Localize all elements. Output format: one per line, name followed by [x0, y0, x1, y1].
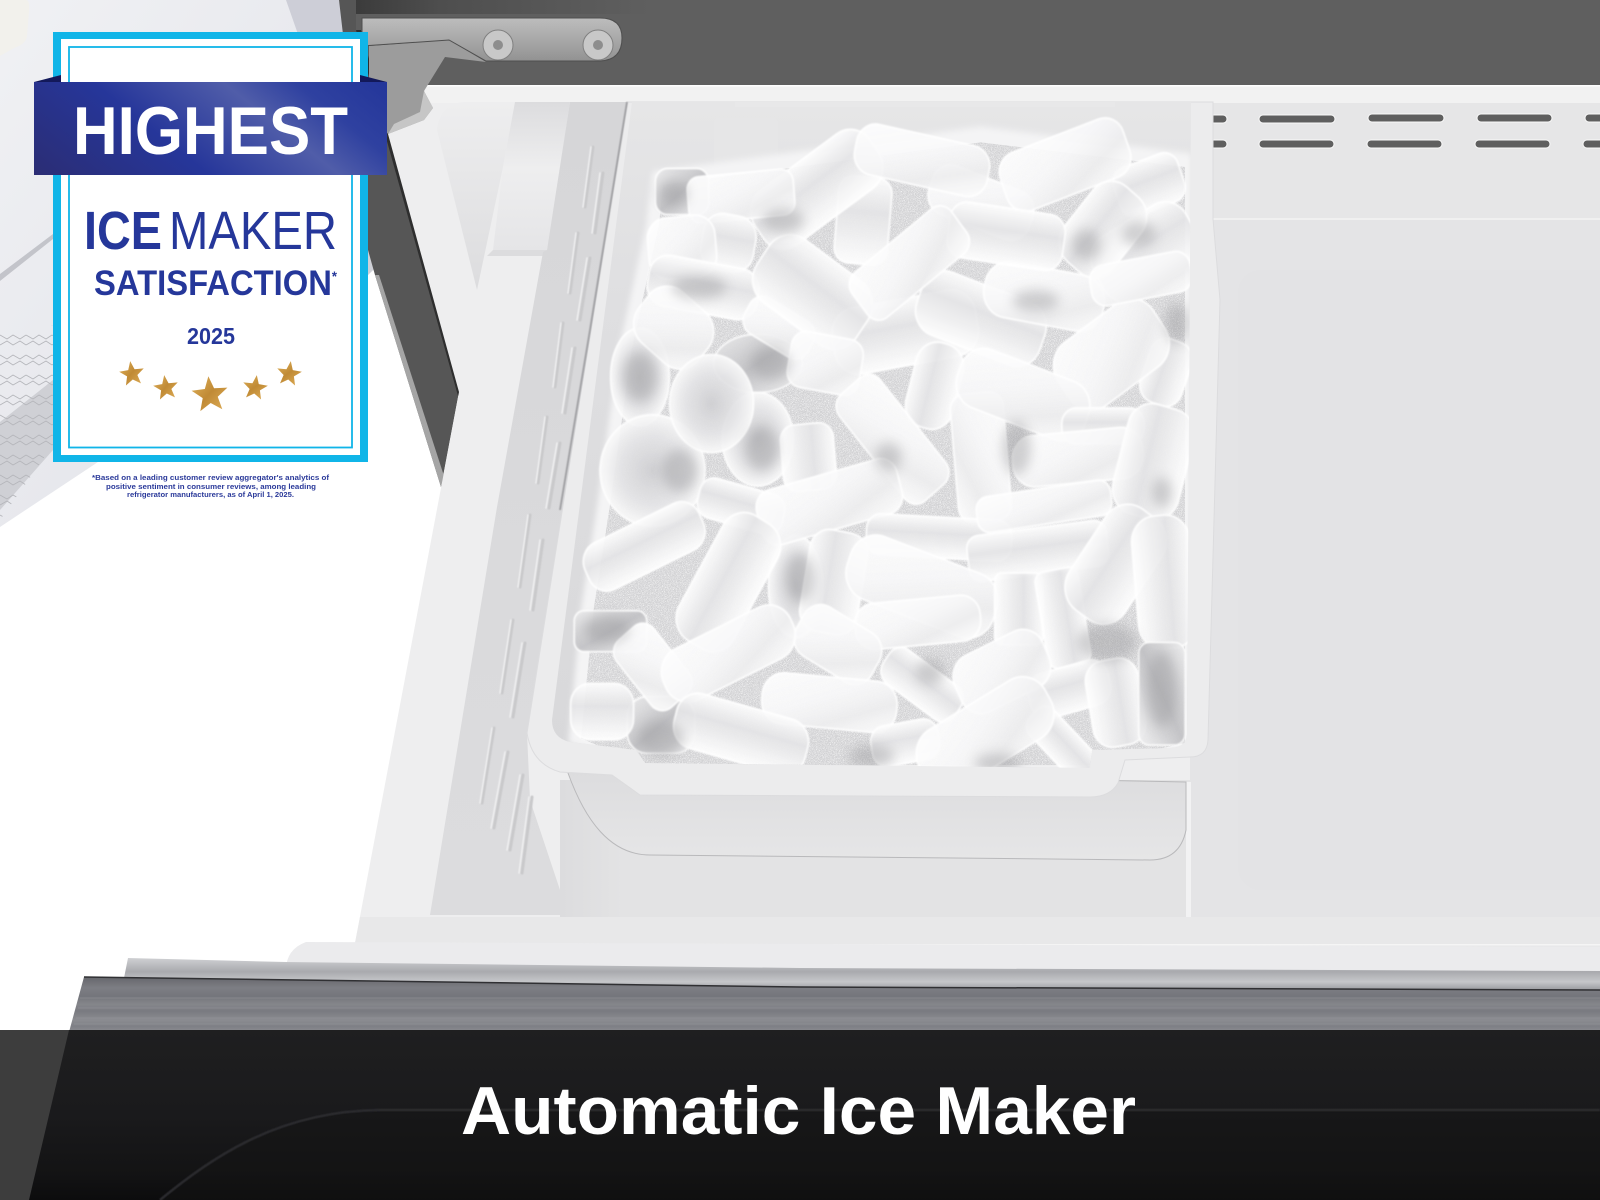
award badge: [34, 32, 387, 499]
door gasket: [124, 958, 1600, 992]
metal hinge: [362, 18, 622, 134]
drawer body: [355, 85, 1600, 1000]
drawer front rail: [286, 917, 1600, 985]
open door shelf: [0, 0, 385, 527]
wall dimples: [480, 147, 603, 873]
heading: ice maker: MAKER: [169, 201, 337, 261]
ice bin body: [568, 770, 1186, 860]
back wall and floor panel: [1186, 103, 1600, 917]
ribbon: HIGHEST: HIGHEST: [73, 93, 348, 169]
ribbon: HIGHEST: [34, 75, 387, 175]
ice shadows: [583, 181, 1188, 772]
dark top cavity: [350, 0, 1600, 86]
heading: ice maker: [84, 201, 337, 261]
caption text: Automatic Ice Maker: [461, 1073, 1136, 1149]
footnote: *Based on a leading customer review aggregator's analytics of: [92, 473, 330, 482]
footnote: [92, 473, 330, 499]
badge frame: [53, 32, 368, 462]
caption band: [0, 1030, 1600, 1200]
five gold stars: [118, 359, 303, 412]
heading: ice maker: ICE: [84, 201, 162, 261]
heading: satisfaction: *: [332, 268, 338, 284]
steel door panel: [69, 977, 1600, 1032]
dark door edge strip: [339, 0, 461, 487]
rim shadow line: [560, 102, 627, 510]
year: 2025: [187, 323, 235, 349]
footnote: refrigerator manufacturers, as of April 1, 2025.: [127, 490, 294, 499]
ice bin interior: [552, 102, 1191, 768]
ice cubes pile: [568, 112, 1208, 801]
vent slots: [1205, 114, 1600, 148]
heading: satisfaction: SATISFACTION: [94, 264, 348, 303]
ice bin rim: [527, 102, 1220, 797]
footnote: positive sentiment in consumer reviews, among leading: [106, 482, 316, 491]
